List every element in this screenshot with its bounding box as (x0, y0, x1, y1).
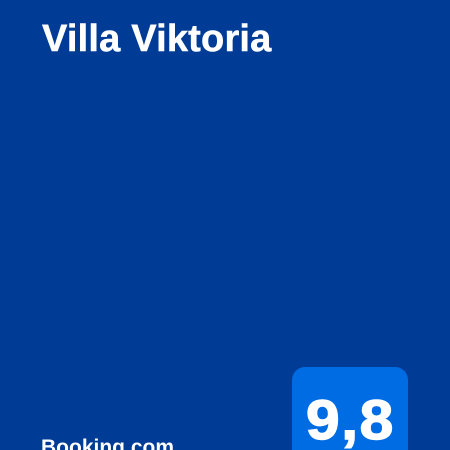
score value: 9,8 (306, 388, 395, 450)
title: Villa Viktoria (42, 18, 272, 60)
score badge (292, 367, 408, 450)
